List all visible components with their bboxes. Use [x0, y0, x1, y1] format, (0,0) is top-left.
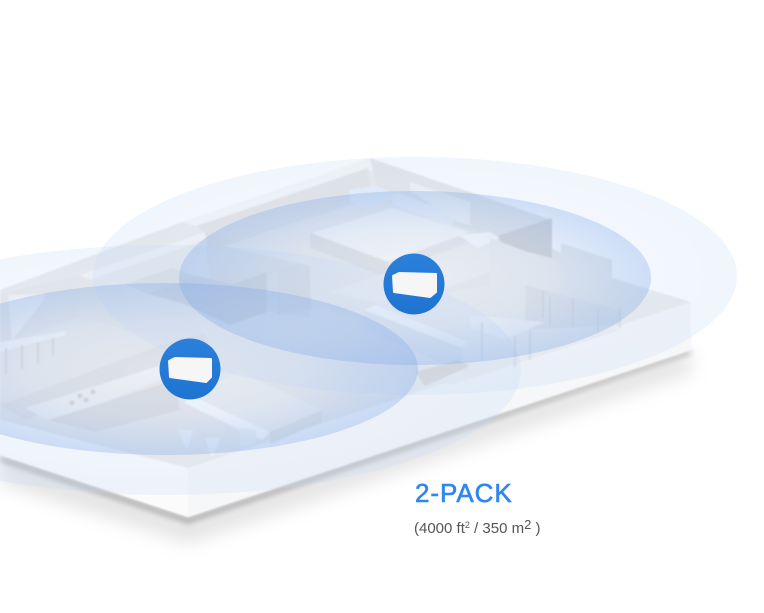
building model	[0, 158, 691, 517]
left room back wall	[0, 275, 80, 348]
glass doors	[525, 285, 620, 330]
heading: 2-pack: 2-PACK	[415, 478, 513, 508]
bedroom floor	[225, 198, 490, 280]
coverage: router 1 outer	[93, 157, 737, 395]
dining table	[470, 315, 545, 340]
right back wall	[370, 158, 552, 258]
living room floor	[365, 285, 620, 385]
bedroom side wall	[330, 236, 500, 305]
bed	[312, 208, 470, 262]
coverage: router 2 inner	[0, 283, 418, 455]
pillows	[390, 191, 426, 216]
stools	[178, 430, 193, 448]
counter	[25, 365, 185, 420]
floor	[0, 158, 691, 468]
sofa	[364, 305, 468, 348]
coverage: router 2 outer	[0, 245, 521, 495]
island	[184, 395, 270, 440]
platform slab	[0, 302, 691, 517]
coverage area text: (4000 ft2 / 350 m2 )	[414, 517, 540, 537]
coverage: router 1 inner	[179, 191, 651, 365]
kitchen and dividing wall	[0, 333, 210, 420]
right-side wall of kitchen	[232, 330, 415, 398]
central partition	[80, 232, 210, 280]
tv	[561, 243, 612, 295]
router icon bottom left	[160, 338, 220, 400]
router icon top right	[384, 254, 444, 314]
platform shadow	[0, 350, 691, 542]
headboard	[410, 182, 470, 225]
left room floor	[0, 318, 200, 420]
back wall	[182, 158, 385, 228]
left table	[8, 294, 44, 340]
